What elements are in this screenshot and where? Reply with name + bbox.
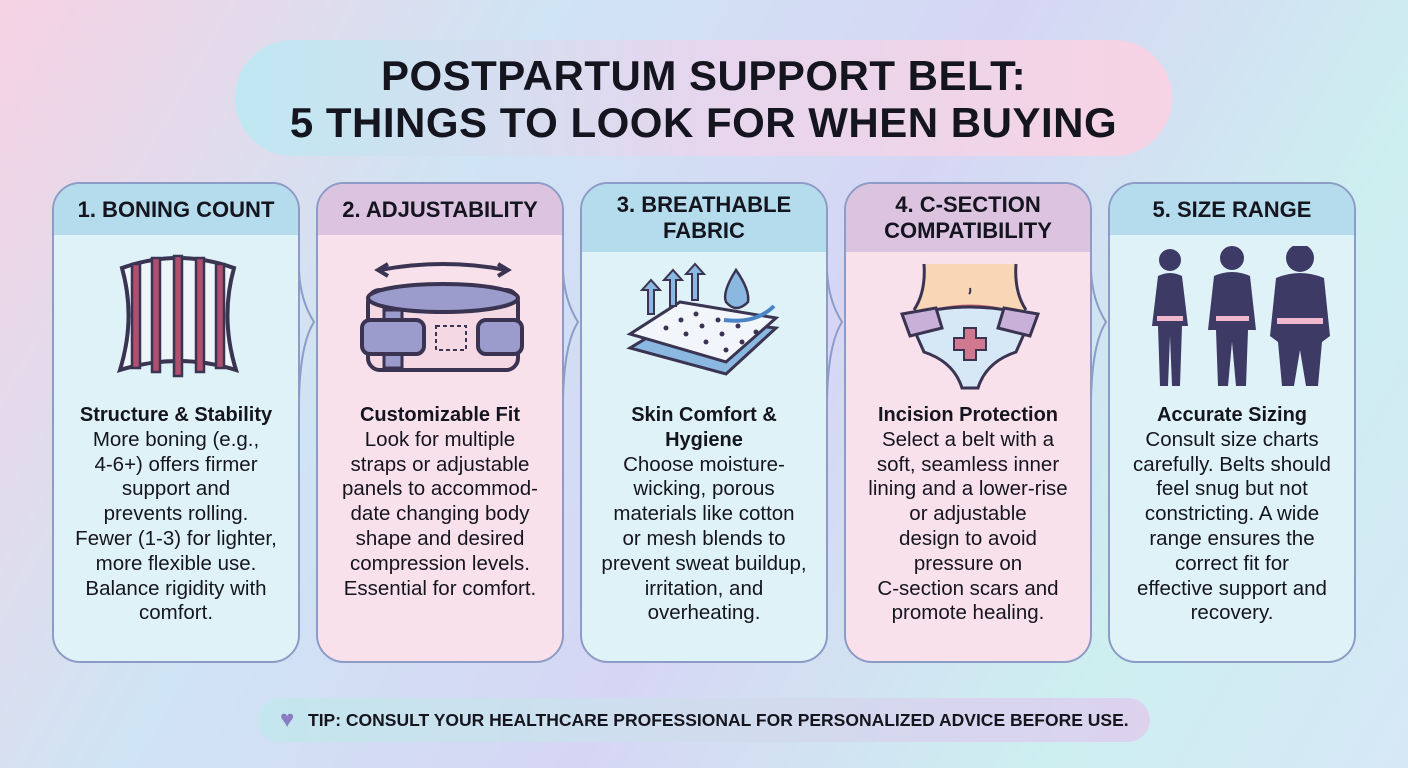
text: Customizable Fit [360,404,520,426]
text: Incision Protection [878,404,1058,426]
heading [54,184,298,235]
tip [258,698,1150,742]
panel: boning count [52,182,300,663]
text: compression levels. [350,552,530,575]
text: constricting. A wide [1145,502,1319,525]
text [1133,404,1331,624]
heading: 5. SIZE RANGE [1153,196,1311,222]
text: Fewer (1-3) for lighter, [75,527,277,550]
text: panels to accommod- [342,477,538,500]
text: Choose moisture- [623,453,785,476]
text: prevents rolling. [104,502,248,525]
text: Accurate Sizing [1157,404,1307,426]
text: overheating. [648,601,760,624]
text: recovery. [1191,601,1273,624]
panel: c-section compatibility [844,182,1092,663]
heading: 4. C-SECTION [895,192,1041,217]
heading [1110,184,1354,235]
panel: size range [1108,182,1356,663]
text: Select a belt with a [882,428,1054,451]
text: Balance rigidity with [85,577,267,600]
text: materials like cotton [613,502,795,525]
text: soft, seamless inner [877,453,1059,476]
panel: adjustability [316,182,564,663]
text: correct fit for [1175,552,1289,575]
text: Look for multiple [365,428,515,451]
icon: belt [360,262,524,372]
text: Skin Comfort & [631,404,777,426]
heading: 2. ADJUSTABILITY [342,196,538,222]
icon: corset [117,254,239,378]
text: Hygiene [665,429,743,451]
text: lining and a lower-rise [868,477,1068,500]
title: POSTPARTUM SUPPORT BELT: [381,52,1026,99]
text: Consult size charts [1145,428,1319,451]
text: date changing body [351,502,529,525]
title: 5 THINGS TO LOOK FOR WHEN BUYING [290,99,1117,146]
panel: breathable fabric [580,182,828,663]
icon: abdomen [900,264,1040,390]
text: or mesh blends to [623,527,785,550]
tip: TIP: CONSULT YOUR HEALTHCARE PROFESSIONAL FOR PERSONALIZED ADVICE BEFORE USE. [308,710,1129,730]
heading: 1. BONING COUNT [78,196,274,222]
text: range ensures the [1149,527,1315,550]
heading: FABRIC [663,218,745,243]
text [868,404,1068,624]
text [342,404,538,600]
text: Structure & Stability [80,404,272,426]
text: Essential for comfort. [344,577,536,600]
text: irritation, and [645,577,763,600]
text: C-section scars and [877,577,1059,600]
text: promote healing. [892,601,1044,624]
text: or adjustable [909,502,1027,525]
text: more flexible use. [96,552,256,575]
icon: body silhouettes [1152,246,1330,386]
text: prevent sweat buildup, [601,552,807,575]
text: comfort. [139,601,213,624]
title [235,40,1172,156]
heading [318,184,562,235]
text: shape and desired [356,527,524,550]
text: 4-6+) offers firmer [94,453,258,476]
text: wicking, porous [633,477,775,500]
heading: COMPATIBILITY [884,218,1052,243]
text: support and [122,477,230,500]
icon: heart: ♥ [280,706,294,733]
heading: 3. BREATHABLE [617,192,791,217]
text [75,404,277,624]
heading [846,184,1090,252]
text: pressure on [914,552,1022,575]
text: feel snug but not [1156,477,1308,500]
text [601,404,807,624]
text: carefully. Belts should [1133,453,1331,476]
text: straps or adjustable [351,453,529,476]
text: design to avoid [899,527,1037,550]
heading [582,184,826,252]
text: effective support and [1137,577,1327,600]
icon: fabric layers [626,262,780,376]
text: More boning (e.g., [93,428,259,451]
